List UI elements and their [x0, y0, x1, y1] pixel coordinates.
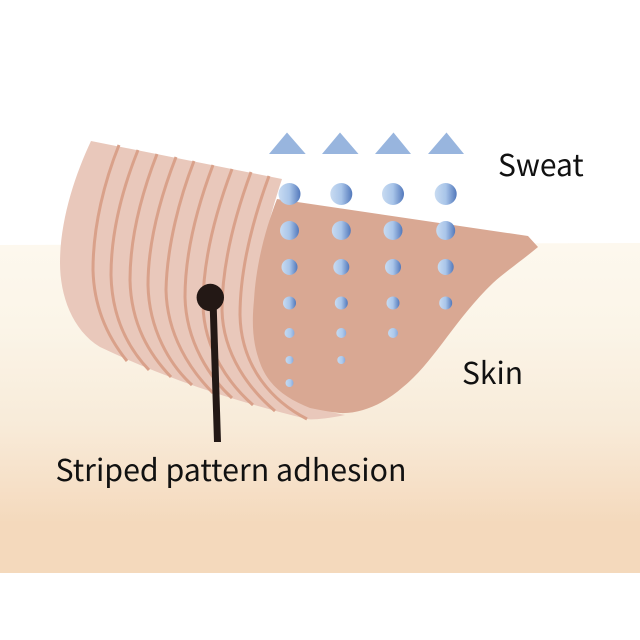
callout pointer [197, 284, 224, 442]
panel: exposed skin flap [253, 199, 538, 413]
label: striped pattern adhesion: Striped pattern adhesion [56, 446, 406, 490]
label: sweat: Sweat [498, 141, 584, 185]
icon: sweat droplets [278, 183, 457, 387]
panel: lifted striped adhesive sheet [60, 141, 345, 419]
label: skin: Skin [462, 349, 523, 393]
stripes [93, 145, 307, 419]
icon: sweat triangles [269, 132, 464, 154]
skin background [0, 243, 640, 573]
adhesive sheet body [60, 141, 345, 419]
